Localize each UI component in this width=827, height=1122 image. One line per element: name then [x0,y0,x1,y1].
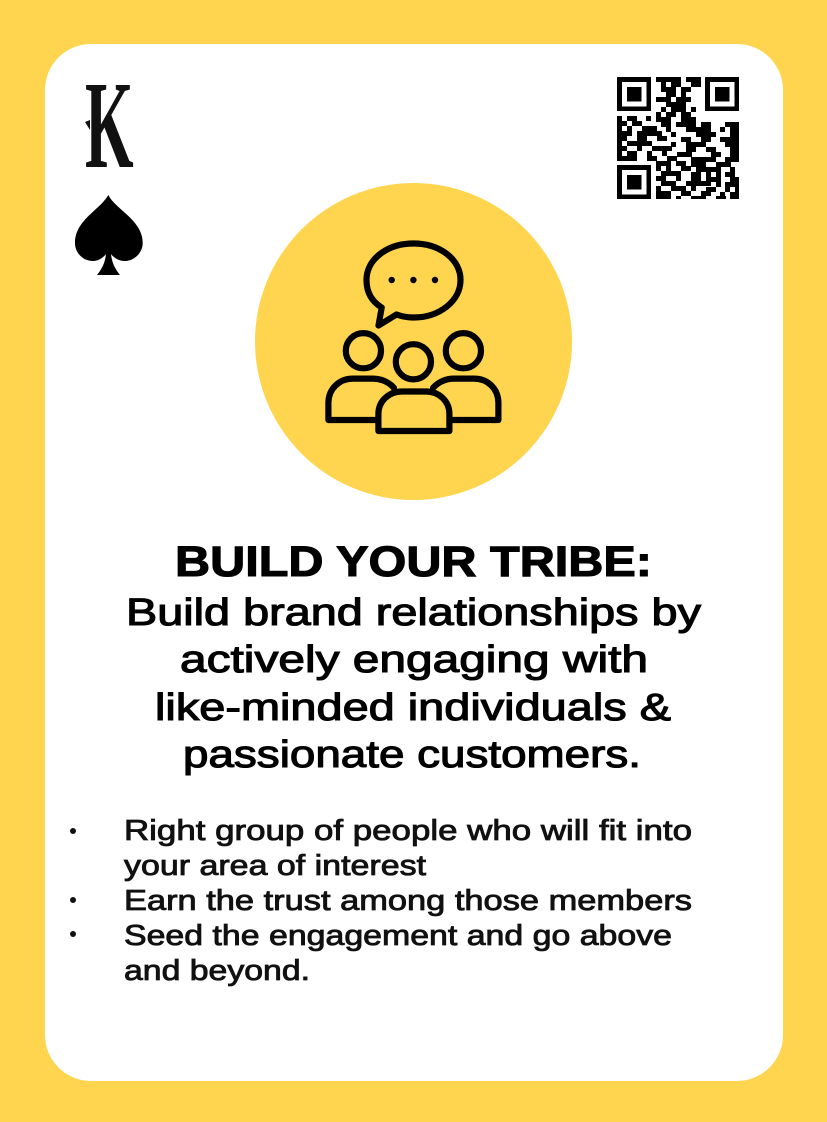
icon: playing card letter K: K [85,57,134,195]
left person [328,333,394,420]
bullet list: Seed the engagement and go above [124,920,672,952]
center person [378,344,449,431]
bullet list: Right group of people who will fit into [124,815,692,847]
right person [433,333,498,420]
bullet list: and beyond. [124,955,310,987]
bullet list [70,815,692,987]
subheading: like-minded individuals & [155,687,671,729]
subheading: Build brand relationships by [126,592,701,634]
icon: three people with speech bubble [328,244,498,431]
speech bubble dots [388,277,438,283]
subheading [126,592,701,776]
icon: spade suit [75,195,143,275]
subheading: passionate customers. [183,734,641,776]
heading: BUILD YOUR TRIBE: [175,538,652,586]
icon circle background [255,183,572,500]
icon: QR code [617,77,739,199]
bullet list: Earn the trust among those members [124,885,692,917]
bullet list: your area of interest [124,850,426,882]
subheading: actively engaging with [180,639,648,681]
speech bubble [366,244,460,326]
